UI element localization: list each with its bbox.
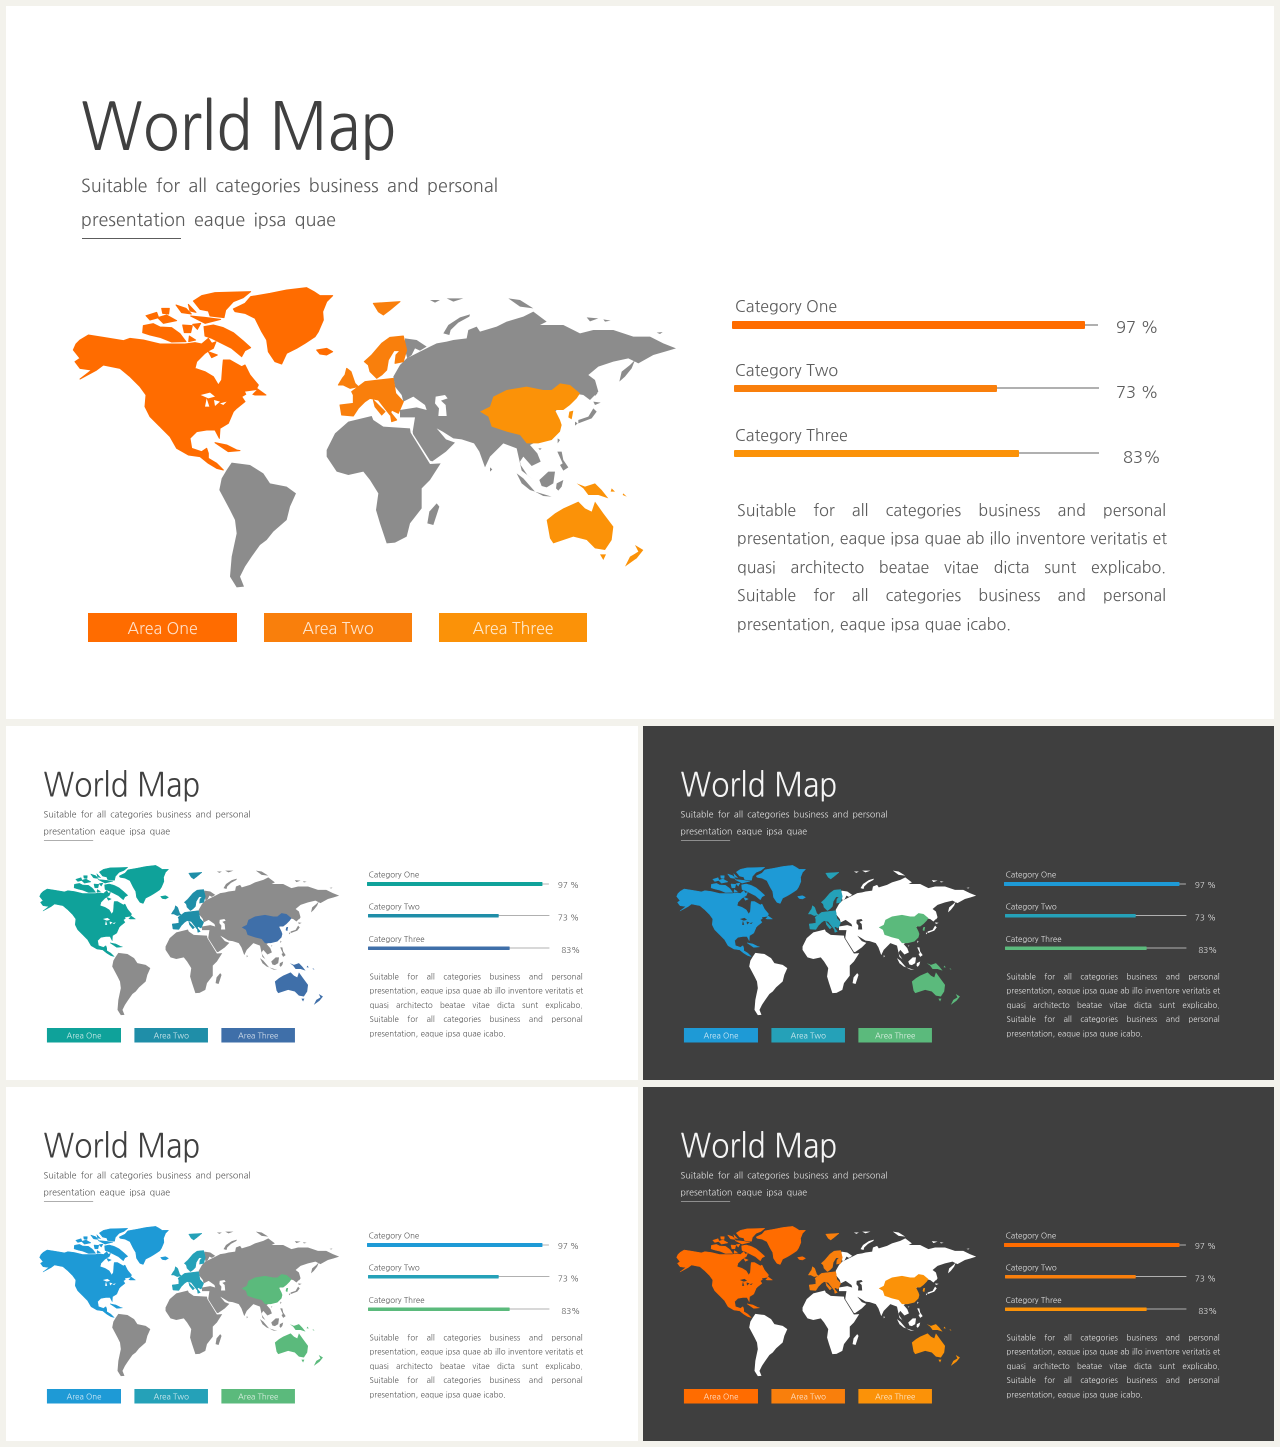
legend: area three xyxy=(858,1389,932,1404)
legend: area two: Area Two xyxy=(153,1393,189,1401)
bar: category one: 97 % xyxy=(558,882,579,890)
legend: area one: Area One xyxy=(703,1032,738,1040)
world map xyxy=(40,865,339,1016)
bar: category three: Category Three xyxy=(368,1296,425,1304)
bar: category three: 83% xyxy=(1123,450,1161,466)
body text: presentation, eaque ipsa quae ab illo inventore veritatis et xyxy=(369,1348,583,1356)
bar: category two: 73 % xyxy=(1195,914,1216,922)
bar: category one xyxy=(1004,1232,1216,1250)
body text: Suitable for all categories business and personal xyxy=(1006,1016,1220,1024)
legend: area one: Area One xyxy=(66,1032,101,1040)
subtitle xyxy=(43,810,251,836)
legend: area one xyxy=(684,1028,758,1042)
body text xyxy=(1006,973,1220,1038)
body text: presentation, eaque ipsa quae ab illo inventore veritatis et xyxy=(1006,987,1220,995)
legend: area three xyxy=(858,1028,932,1042)
bar: category three xyxy=(368,1296,580,1316)
subtitle: Suitable for all categories business and personal xyxy=(43,1171,251,1180)
legend: area one: Area One xyxy=(703,1393,738,1401)
bar: category three xyxy=(1005,936,1217,954)
subtitle: Suitable for all categories business and personal xyxy=(680,1171,888,1180)
legend: area one: Area One xyxy=(127,621,198,637)
bar: category one: 97 % xyxy=(1195,1242,1216,1250)
subtitle xyxy=(680,1171,888,1197)
legend: area one xyxy=(684,1389,758,1404)
subtitle: presentation eaque ipsa quae xyxy=(43,827,170,836)
bar: category one xyxy=(367,1232,579,1250)
panel: blue dark slide xyxy=(643,726,1274,1080)
body text: Suitable for all categories business and personal xyxy=(1006,973,1220,981)
bar: category two: Category Two xyxy=(1005,1264,1057,1272)
body text: presentation, eaque ipsa quae ab illo inventore veritatis et xyxy=(737,531,1167,547)
legend: area two: Area Two xyxy=(790,1393,826,1401)
panel: blue light slide xyxy=(6,1087,638,1441)
bar: category three: Category Three xyxy=(368,936,425,944)
bar: category three: Category Three xyxy=(1005,936,1062,944)
panel: teal light slide xyxy=(6,726,638,1080)
bar: category one xyxy=(367,871,579,890)
subtitle: presentation eaque ipsa quae xyxy=(680,827,807,836)
legend: area one xyxy=(47,1028,121,1042)
bar: category two: Category Two xyxy=(735,363,838,379)
legend: area one: Area One xyxy=(66,1393,101,1401)
body text: quasi architecto beatae vitae dicta sunt explicabo. xyxy=(369,1002,583,1010)
body text: Suitable for all categories business and personal xyxy=(369,973,583,981)
world map xyxy=(40,1226,339,1376)
body text xyxy=(369,1334,584,1399)
legend: area two xyxy=(134,1028,208,1042)
bar: category two: 73 % xyxy=(1116,385,1159,401)
legend: area two: Area Two xyxy=(153,1032,189,1040)
body text: Suitable for all categories business and personal xyxy=(369,1016,583,1024)
legend: area three xyxy=(439,613,587,642)
legend: area three xyxy=(221,1389,295,1404)
body text: Suitable for all categories business and personal xyxy=(369,1334,583,1342)
bar: category three: 83% xyxy=(561,946,580,954)
bar: category one: 97 % xyxy=(1195,882,1216,890)
body text xyxy=(1006,1334,1220,1399)
body text: presentation, eaque ipsa quae icabo. xyxy=(737,617,1011,633)
bar: category two: 73 % xyxy=(558,1275,579,1283)
bar: category three: Category Three xyxy=(735,428,848,444)
bar: category one: Category One xyxy=(368,871,419,879)
subtitle: Suitable for all categories business and personal xyxy=(680,810,888,819)
subtitle xyxy=(680,810,888,836)
subtitle: presentation eaque ipsa quae xyxy=(81,211,336,229)
body text: Suitable for all categories business and personal xyxy=(1006,1376,1220,1384)
body text: quasi architecto beatae vitae dicta sunt explicabo. xyxy=(1006,1362,1220,1370)
body text: presentation, eaque ipsa quae icabo. xyxy=(1006,1030,1143,1038)
title: World Map xyxy=(43,1130,201,1162)
body text: Suitable for all categories business and personal xyxy=(737,588,1166,604)
legend: area two: Area Two xyxy=(302,621,374,637)
body text: Suitable for all categories business and personal xyxy=(1006,1334,1220,1342)
bar: category two xyxy=(734,363,1159,401)
subtitle xyxy=(81,177,498,229)
body text: quasi architecto beatae vitae dicta sunt explicabo. xyxy=(1006,1002,1220,1010)
world map xyxy=(676,865,976,1016)
legend: area two xyxy=(771,1389,845,1404)
title: World Map xyxy=(680,768,838,802)
bar: category three: 83% xyxy=(1198,1308,1217,1316)
bar: category three: 83% xyxy=(1198,946,1217,954)
body text: quasi architecto beatae vitae dicta sunt explicabo. xyxy=(737,560,1166,576)
bar: category one xyxy=(732,299,1159,336)
bar: category one: Category One xyxy=(735,299,837,315)
body text: presentation, eaque ipsa quae icabo. xyxy=(369,1030,506,1038)
body text: quasi architecto beatae vitae dicta sunt explicabo. xyxy=(369,1362,583,1370)
subtitle: presentation eaque ipsa quae xyxy=(43,1188,170,1197)
bar: category three: 83% xyxy=(561,1308,580,1316)
bar: category two: Category Two xyxy=(368,1264,420,1272)
bar: category three xyxy=(368,936,580,954)
legend: area two xyxy=(771,1028,845,1042)
bar: category two: Category Two xyxy=(368,903,420,911)
bar: category one: Category One xyxy=(1005,871,1056,879)
world map xyxy=(72,287,676,588)
world map xyxy=(676,1226,976,1376)
subtitle: Suitable for all categories business and personal xyxy=(43,810,251,819)
bar: category three: Category Three xyxy=(1005,1296,1062,1304)
bar: category two: Category Two xyxy=(1005,903,1057,911)
body text: presentation, eaque ipsa quae ab illo inventore veritatis et xyxy=(1006,1348,1220,1356)
bar: category two xyxy=(1005,1264,1216,1283)
legend: area two: Area Two xyxy=(790,1032,826,1040)
bar: category two xyxy=(368,903,579,922)
legend: area one xyxy=(47,1389,121,1404)
legend: area three xyxy=(221,1028,295,1042)
bar: category one: 97 % xyxy=(558,1242,579,1250)
bar: category two: 73 % xyxy=(1195,1275,1216,1283)
title: World Map xyxy=(43,768,201,802)
body text: presentation, eaque ipsa quae icabo. xyxy=(369,1391,506,1399)
body text: Suitable for all categories business and personal xyxy=(737,503,1166,519)
legend: area three: Area Three xyxy=(238,1032,278,1040)
bar: category two xyxy=(368,1264,579,1283)
legend: area three: Area Three xyxy=(875,1393,915,1401)
bar: category one: 97 % xyxy=(1116,320,1159,336)
body text: presentation, eaque ipsa quae ab illo inventore veritatis et xyxy=(369,987,583,995)
bar: category one xyxy=(1004,871,1216,890)
legend: area one xyxy=(88,613,237,642)
body text xyxy=(737,503,1167,633)
bar: category one: Category One xyxy=(368,1232,419,1240)
subtitle xyxy=(43,1171,251,1197)
body text xyxy=(369,973,584,1038)
title: World Map xyxy=(680,1130,838,1162)
bar: category three xyxy=(734,428,1161,466)
legend: area two xyxy=(264,613,412,642)
body text: presentation, eaque ipsa quae icabo. xyxy=(1006,1391,1143,1399)
bar: category two xyxy=(1005,903,1216,922)
subtitle: Suitable for all categories business and personal xyxy=(81,177,498,195)
subtitle: presentation eaque ipsa quae xyxy=(680,1188,807,1197)
title: World Map xyxy=(81,94,397,160)
bar: category two: 73 % xyxy=(558,914,579,922)
bar: category one: Category One xyxy=(1005,1232,1056,1240)
legend: area three: Area Three xyxy=(472,621,554,637)
body text: Suitable for all categories business and personal xyxy=(369,1376,583,1384)
bar: category three xyxy=(1005,1296,1217,1316)
panel: orange dark slide xyxy=(643,1087,1274,1441)
legend: area three: Area Three xyxy=(875,1032,915,1040)
legend: area three: Area Three xyxy=(238,1393,278,1401)
panel: main orange slide xyxy=(6,6,1274,719)
legend: area two xyxy=(134,1389,208,1404)
